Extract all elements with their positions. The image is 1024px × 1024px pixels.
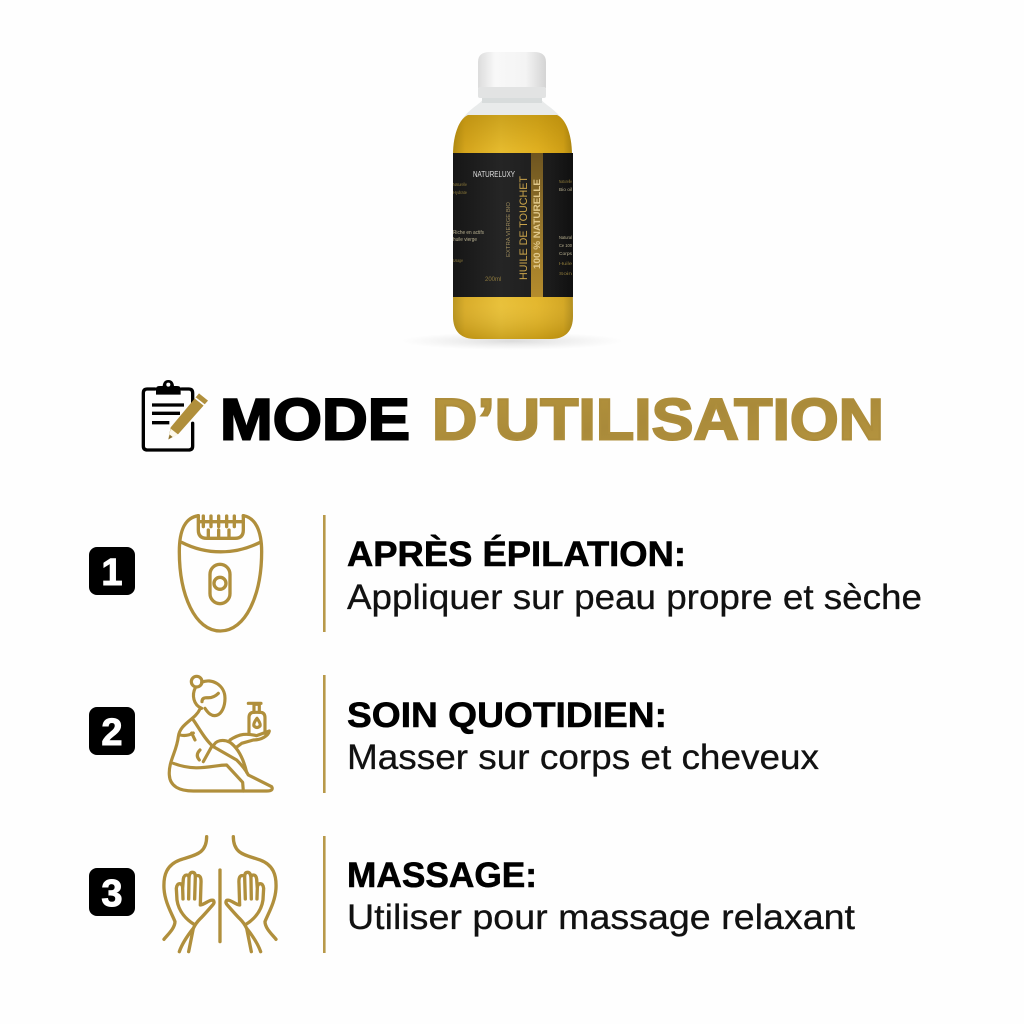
number badge 3: 3 <box>101 873 123 915</box>
bottle label: Usage <box>453 258 463 263</box>
step 2 text <box>347 696 820 777</box>
step 2 text: SOIN QUOTIDIEN: <box>347 696 667 735</box>
icon: epilator <box>179 516 262 631</box>
step 3 text: Utiliser pour massage relaxant <box>347 898 855 937</box>
icon: seated woman with bottle <box>169 676 272 791</box>
title text MODE: MODE <box>220 388 410 452</box>
product bottle <box>400 52 624 350</box>
number badge 1 <box>89 547 135 595</box>
step 3 text: MASSAGE: <box>347 856 537 895</box>
bottle label: Soin <box>559 271 573 276</box>
bottle label <box>453 153 573 297</box>
bottle label: huile vierge <box>453 237 477 243</box>
step 1 text: Appliquer sur peau propre et sèche <box>347 578 922 617</box>
bottle label: Naturelle <box>453 182 467 187</box>
icon: massage hands on back <box>164 837 276 952</box>
bottle label: Huile <box>559 261 573 266</box>
bottle label: 200ml <box>485 277 501 283</box>
heading <box>143 380 884 452</box>
bottle label: Corps <box>559 251 573 256</box>
bottle cap <box>478 52 546 98</box>
number badge 2 <box>89 707 135 755</box>
bottle label: HUILE DE TOUCHET <box>518 176 530 280</box>
bottle label: Riche en actifs <box>453 230 484 236</box>
step 1 text: APRÈS ÉPILATION: <box>347 534 686 574</box>
bottle label: Natural <box>559 235 572 240</box>
icon: clipboard and pencil <box>143 380 208 450</box>
divider 1 <box>323 515 326 632</box>
bottle label: Bio oil <box>559 187 572 192</box>
bottle label: Hydrate <box>453 190 467 195</box>
bottle label: Naturelle <box>559 179 572 184</box>
step 3 <box>89 836 855 953</box>
step 1 text <box>347 534 922 617</box>
step 2 <box>89 675 820 793</box>
step 2 text: Masser sur corps et cheveux <box>347 738 820 777</box>
number badge 1: 1 <box>101 552 123 594</box>
divider 3 <box>323 836 326 953</box>
step 1 <box>89 515 922 632</box>
number badge 3 <box>89 868 135 916</box>
title text D'UTILISATION: D’UTILISATION <box>432 388 884 452</box>
divider 2 <box>323 675 326 793</box>
bottle label: NATURELUXY <box>473 170 516 179</box>
step 3 text <box>347 856 855 937</box>
bottle label: 100 % NATURELLE <box>532 179 543 269</box>
number badge 2: 2 <box>101 712 123 754</box>
bottle label: Ce 100 <box>559 243 572 248</box>
bottle label: EXTRA VIERGE BIO <box>506 201 512 257</box>
